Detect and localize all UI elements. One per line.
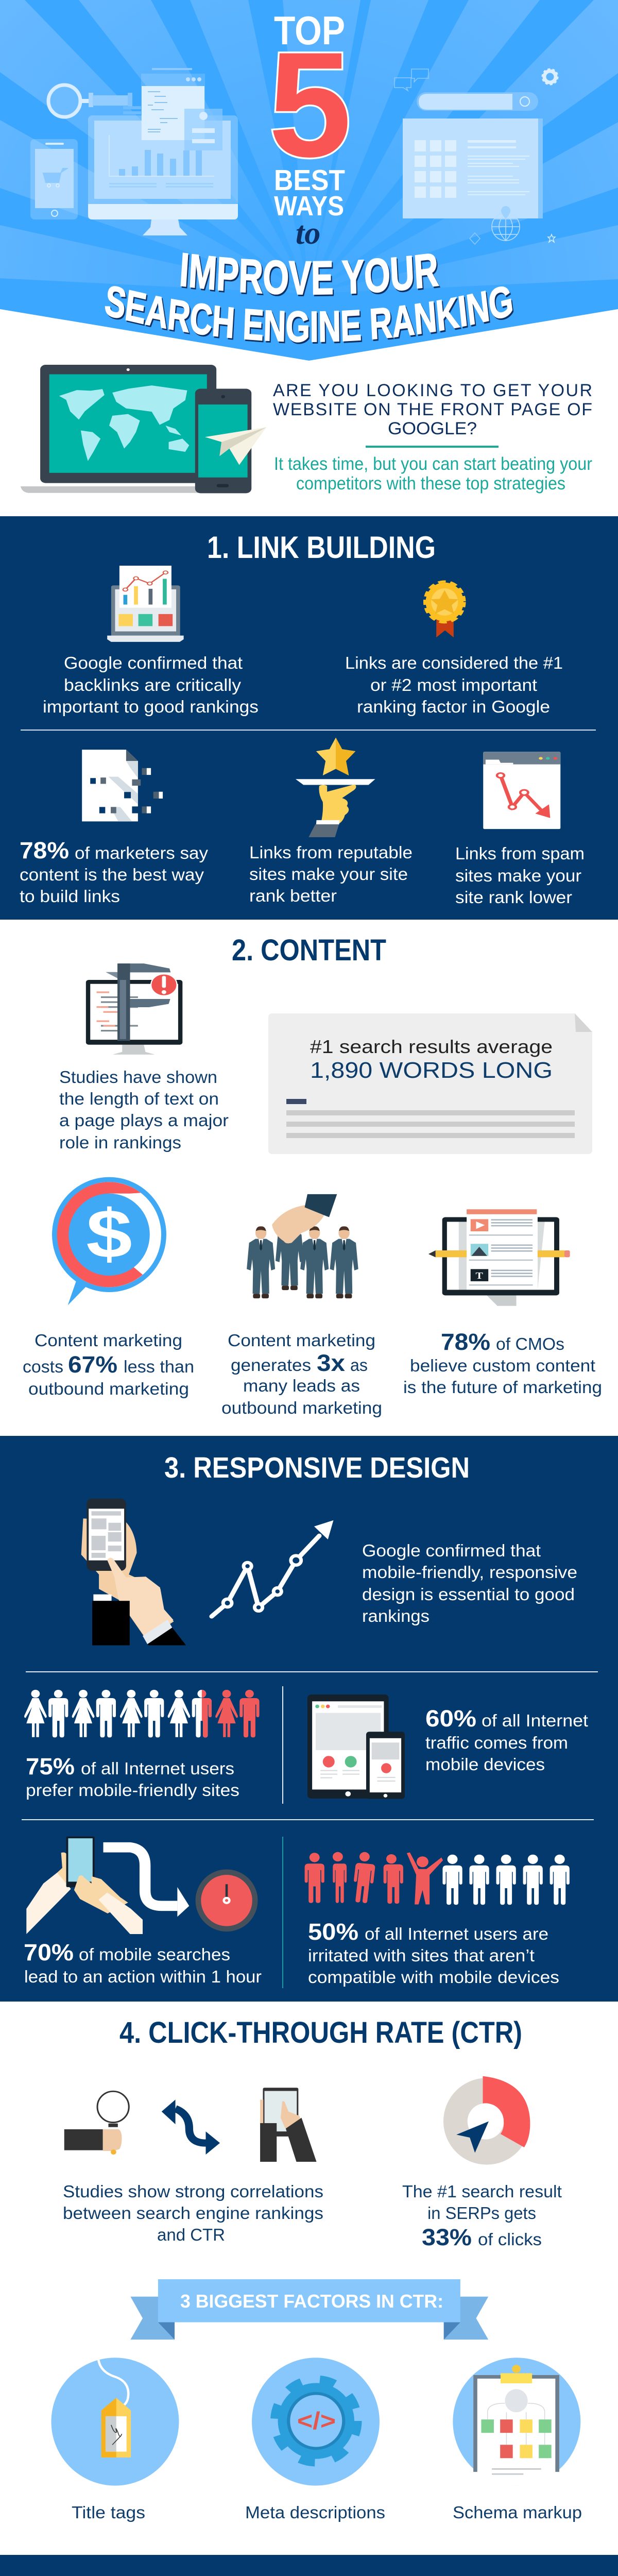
text: 75 percent: prefer mobile-friendly sites [26, 1781, 239, 1800]
text: reputable sites: Links from reputable [249, 843, 413, 862]
text: 78% of CMOs: 78% [441, 1329, 490, 1355]
panel: 4 click-through rate [51, 2016, 582, 2522]
illustration: desktop monitor with chart [88, 115, 238, 235]
icons: gear, chat bubbles, globe, diamond, star [394, 69, 558, 244]
text: backlinks: backlinks are critically [64, 675, 242, 694]
text: ranking factor [345, 653, 563, 716]
title: best: BEST [274, 164, 345, 197]
text: correlations: and CTR [157, 2225, 225, 2244]
icon: rising trend arrow [212, 1520, 333, 1616]
icon: hand with magnifier, arrows and tablet [64, 2088, 317, 2162]
text: 33 percent: in SERPs gets [427, 2204, 536, 2223]
text: 67% less: costs [23, 1357, 63, 1376]
text: correlations: Studies show strong correlations [63, 2182, 323, 2201]
text: 75 percent: of all Internet users [81, 1759, 234, 1778]
text: length of text [59, 1067, 229, 1152]
icon: star on serving tray [296, 738, 375, 837]
text: 3x leads: outbound marketing [221, 1398, 382, 1417]
title: improve your: IMPROVE YOUR [180, 252, 441, 297]
text: length of text: the length of text on [59, 1089, 219, 1108]
icon: monitor with caliper and alert [86, 963, 182, 1055]
text: 50 percent: 50% [308, 1919, 358, 1945]
text: mobile-friendly design: mobile-friendly, responsive [362, 1563, 577, 1582]
hero sunburst background [0, 0, 618, 361]
text: 60 percent: 60% [425, 1705, 476, 1732]
text: 78% of marketers: content is the best way [20, 865, 204, 884]
text: 50 percent: of all Internet users are [365, 1924, 548, 1943]
text: spam sites: site rank lower [455, 888, 572, 907]
ribbon banner: 3 BIGGEST FACTORS IN CTR: [180, 2291, 443, 2312]
text: 78% of CMOs: is the future of marketing [403, 1378, 602, 1397]
text: 67% less: 67% [68, 1351, 117, 1378]
text: 75 percent: 75% [26, 1753, 75, 1780]
text: 33 percent [402, 2182, 562, 2250]
text: 60 percent: traffic comes from [425, 1733, 568, 1752]
text: 78% of marketers: of marketers say [75, 843, 209, 862]
text: 70 percent: 70% [24, 1939, 74, 1965]
title: top: TOP [274, 8, 345, 53]
card: average word count document [268, 1013, 592, 1154]
illustration: search results window [403, 118, 543, 218]
icon: title tag [51, 2358, 179, 2486]
intro heading: GOOGLE? [388, 419, 477, 438]
panel: 3 responsive design [0, 1436, 618, 2002]
text: correlations: between search engine rankings [63, 2204, 323, 2223]
heading: 2. CONTENT [232, 934, 386, 967]
icon: schema clipboard [453, 2358, 580, 2486]
text: 50 percent: compatible with mobile devices [308, 1968, 559, 1987]
icon: medal [425, 582, 465, 637]
text: 3x leads: Content marketing [228, 1331, 375, 1350]
text: mobile-friendly design: design is essential to good [362, 1585, 575, 1604]
text: 67% less: less than [124, 1357, 194, 1376]
text: 78% of CMOs [403, 1329, 602, 1397]
text: 78% of marketers [20, 837, 209, 906]
text: correlations [63, 2182, 323, 2244]
text: reputable sites: rank better [249, 886, 337, 905]
text: 50 percent [308, 1919, 559, 1987]
icon: dollar speech bubble [52, 1177, 166, 1305]
icon: hand picking business people [247, 1194, 358, 1298]
icon: row of people 75 percent [24, 1690, 260, 1737]
text: ranking factor: Links are considered the #1 [345, 653, 563, 672]
intro heading [273, 381, 592, 438]
heading: 4. CLICK-THROUGH RATE (CTR) [119, 2016, 522, 2049]
label: meta descriptions: Meta descriptions [245, 2503, 385, 2522]
icon: phone search to stopwatch [26, 1837, 258, 1934]
icon: tablet and phone [307, 1694, 405, 1799]
text: spam sites: Links from spam [455, 844, 585, 863]
label: title tags: Title tags [72, 2503, 145, 2522]
illustration: magnifier and syringe tool [48, 85, 141, 117]
text: 33 percent: of clicks [478, 2230, 542, 2249]
text: 78% of CMOs: believe custom content [410, 1356, 595, 1375]
panel: 5 multimedia [0, 2555, 618, 2576]
card: average word count document: 1,890 WORDS LONG [310, 1058, 553, 1083]
icon: row of irritated and calm people [305, 1852, 570, 1905]
card: average word count document: #1 search results average [310, 1036, 553, 1057]
text: length of text: Studies have shown [59, 1067, 217, 1087]
illustration: search bar [417, 92, 538, 111]
text: 3x leads: many leads as [243, 1376, 360, 1395]
title: big numeral 5: 5 [268, 21, 352, 188]
text: 75 percent [26, 1753, 239, 1800]
text: 67% less: outbound marketing [28, 1379, 189, 1398]
text: 60 percent: mobile devices [425, 1755, 545, 1774]
text: 3x leads: generates [231, 1355, 311, 1375]
icon: dollar speech bubble: $ [86, 1196, 132, 1273]
illustration: smartphone with cart [30, 139, 78, 219]
intro panel [21, 365, 592, 494]
ribbon banner [130, 2279, 488, 2340]
text: reputable sites: sites make your site [249, 865, 408, 884]
panel: 1 link building [0, 516, 618, 920]
text: ranking factor: ranking factor in Google [357, 697, 550, 716]
intro subheading: competitors with these top strategies [296, 473, 565, 494]
text: 70 percent: of mobile searches [79, 1945, 230, 1964]
heading: 3. RESPONSIVE DESIGN [164, 1451, 470, 1484]
title: search engine ranking: SEARCH ENGINE RANKING [105, 286, 514, 344]
label: schema markup: Schema markup [453, 2503, 582, 2522]
text: 60 percent: of all Internet [482, 1711, 588, 1730]
text: 67% less [23, 1331, 194, 1398]
text: length of text: role in rankings [59, 1133, 181, 1152]
intro subheading: It takes time, but you can start beating your [274, 454, 592, 474]
icon: meta code gear [252, 2358, 380, 2486]
text: 60 percent [425, 1705, 588, 1774]
text: 70 percent [24, 1939, 262, 1986]
heading: 1. LINK BUILDING [207, 530, 436, 565]
text: 78% of marketers: 78% [20, 837, 69, 863]
text: mobile-friendly design: rankings [362, 1606, 430, 1625]
text: 50 percent: irritated with sites that aren’t [308, 1946, 535, 1965]
text: 70 percent: lead to an action within 1 hour [24, 1967, 262, 1986]
text: 3x leads [221, 1331, 382, 1417]
illustration: login panel [184, 109, 222, 150]
text: 33 percent: 33% [422, 2224, 472, 2250]
icon: tablet with content page and pencil: T [475, 1270, 483, 1281]
icon: laptop and phone with world map [21, 365, 266, 493]
icon: donut gauge with cursor [443, 2076, 530, 2165]
text: backlinks [43, 653, 259, 716]
intro subheading [274, 454, 592, 494]
icon: meta code gear: </> [297, 2407, 336, 2435]
panel: 2 content [23, 934, 602, 1417]
title: to: to [296, 216, 320, 251]
intro heading: ARE YOU LOOKING TO GET YOUR [273, 381, 592, 400]
text: 78% of marketers: to build links [20, 887, 120, 906]
text: length of text: a page plays a major [59, 1111, 229, 1130]
text: spam sites [455, 844, 585, 907]
text: ranking factor: or #2 most important [370, 675, 537, 694]
text: mobile-friendly design [362, 1541, 577, 1625]
text: 3x leads: 3x [317, 1350, 345, 1376]
text: 3x leads: as [350, 1355, 368, 1375]
icon: laptop with chart report [107, 566, 184, 642]
divider [366, 446, 499, 448]
icon: browser with falling trend line [483, 752, 560, 829]
hero banner [0, 0, 618, 361]
text: reputable sites [249, 843, 413, 905]
text: backlinks: important to good rankings [43, 697, 259, 716]
text: 33 percent: The #1 search result [402, 2182, 562, 2201]
text: 67% less: Content marketing [35, 1331, 182, 1350]
text: 78% of CMOs: of CMOs [496, 1334, 564, 1353]
text: mobile-friendly design: Google confirmed that [362, 1541, 541, 1560]
icon: tablet with content page and pencil [428, 1209, 570, 1306]
title: ways: WAYS [274, 191, 344, 222]
illustration: code window [141, 68, 205, 140]
text: backlinks: Google confirmed that [64, 653, 243, 672]
text: spam sites: sites make your [455, 866, 581, 885]
icon: hand holding smartphone [81, 1499, 186, 1646]
icon: fragmenting document [82, 750, 163, 821]
intro heading: WEBSITE ON THE FRONT PAGE OF [273, 400, 592, 419]
